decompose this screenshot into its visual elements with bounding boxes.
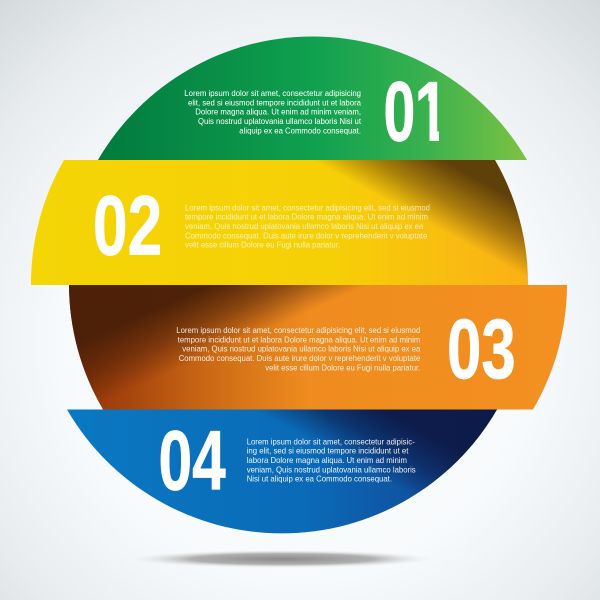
- text block 04: Lorem ipsum dolor sit amet, consectetur adipisic-: [247, 436, 415, 446]
- dark shading: [319, 160, 528, 274]
- number 04: 04: [158, 414, 226, 508]
- text block 03: [176, 325, 421, 372]
- text block 02: Lorem ipsum dolor sit amet, consectetur adipisicing elit, sed si eiusmod: [185, 202, 430, 212]
- text block 03: velit esse cillum Dolore eu Fugi nulla pariatur.: [265, 362, 420, 372]
- number 01: 1: [414, 65, 448, 159]
- number 01: 0: [384, 66, 415, 159]
- text block 03: veniam, Quis nostrud uplatovania ullamco laboris Nisi ut aliquip ex ea: [182, 344, 421, 354]
- text block 03: tempore incididunt ut et labora Dolore magna aliqua. Ut enim ad minim: [178, 334, 420, 344]
- text block 04: [247, 436, 416, 484]
- panel: 01 green segment: [98, 36, 527, 160]
- band shape: [69, 285, 567, 410]
- number 01: [386, 81, 439, 142]
- dark shading: [69, 285, 362, 398]
- segment shape: [98, 36, 527, 160]
- text block 04: Nisi ut aliquip ex ea Commodo consequat.: [247, 474, 392, 484]
- text block 03: Lorem ipsum dolor sit amet, consectetur adipisicing elit, sed si eiusmod: [176, 325, 421, 335]
- number 03: 03: [447, 302, 516, 396]
- number 02: 02: [93, 178, 162, 273]
- text block 04: ing elit, sed si eiusmod tempore incididunt ut et: [247, 446, 409, 456]
- text block 01: elit, sed si eiusmod tempore incididunt ut et labora: [188, 97, 361, 107]
- panel: 02 yellow band: [31, 160, 528, 285]
- text block 02: tempore incididunt ut et labora Dolore magna aliqua. Ut enim ad minim: [185, 212, 428, 222]
- floor shadow: [130, 550, 434, 568]
- text block 03: Commodo consequat. Duis aute irure dolor v reprehenderit v voluptate: [179, 353, 421, 363]
- text block 02: veniam, Quis nostrud uplatovania ullamco laboris Nisi ut aliquip ex ea: [185, 221, 424, 231]
- text block 02: [185, 202, 430, 250]
- text block 01: [184, 88, 362, 135]
- panel: 04 blue segment: [67, 410, 497, 534]
- text block 01: Dolore magna aliqua. Ut enim ad minim veniam,: [195, 107, 361, 117]
- band shape: [31, 160, 528, 285]
- text block 04: veniam, Quis nostrud uplatovania ullamco laboris: [247, 464, 416, 474]
- panel: 03 orange band: [69, 285, 567, 410]
- dark shading: [262, 410, 497, 493]
- text block 02: velit esse cillum Dolore eu Fugi nulla pariatur.: [185, 240, 340, 250]
- text block 02: Commodo consequat. Duis aute irure dolor v reprehenderit v voluptate: [185, 230, 428, 240]
- text block 04: labora Dolore magna aliqua. Ut enim ad minim: [247, 455, 407, 465]
- text block 01: Lorem ipsum dolor sit amet, consectetur adipisicing: [184, 88, 361, 98]
- text block 01: Quis nostrud uplatovania ullamco laboris Nisi ut: [198, 116, 362, 126]
- segment shape: [67, 410, 497, 533]
- text block 01: aliquip ex ea Commodo consequat.: [239, 125, 361, 135]
